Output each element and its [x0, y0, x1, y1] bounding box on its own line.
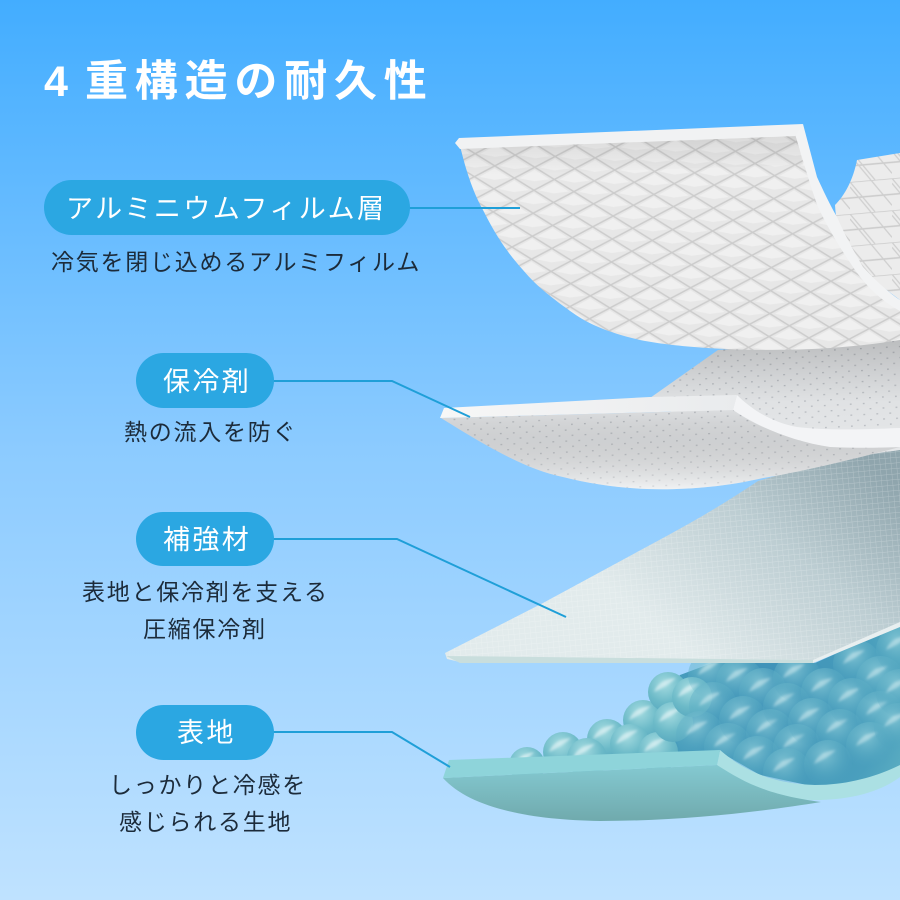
- front sheet: [460, 130, 900, 350]
- layer 2: cold-retaining insulation sheet: [440, 335, 900, 489]
- pill: [44, 180, 410, 235]
- pill: [136, 512, 274, 566]
- layer 1: aluminium film quilted sheet: [455, 124, 900, 350]
- description: 熱の流入を防ぐ: [124, 419, 297, 445]
- callout: aluminium film layer: アルミニウムフィルム層: [66, 194, 386, 224]
- back sheet: [650, 335, 900, 470]
- callout: reinforcement: 圧縮保冷剤: [143, 616, 267, 642]
- back curl: [835, 153, 900, 300]
- title: 重構造の耐久性: [85, 58, 434, 106]
- callout: reinforcement: [82, 512, 329, 642]
- curved right edge: [795, 124, 900, 311]
- top band: [443, 750, 720, 778]
- callout: surface fabric: 表地: [177, 718, 236, 748]
- description: 表地と保冷剤を支える: [82, 579, 329, 605]
- callout: insulation: [124, 353, 297, 445]
- callout: insulation: 保冷剤: [163, 367, 251, 397]
- front sheet: [441, 410, 900, 489]
- description: しっかりと冷感を: [109, 772, 307, 798]
- title: 4: [44, 58, 68, 106]
- layer 3: reinforcement sheet: [445, 440, 900, 663]
- layer 4: bubble lining and teal surface fabric: [443, 625, 900, 821]
- front body: [443, 765, 821, 821]
- callout: surface fabric: [109, 705, 307, 835]
- curved cut edge: [733, 395, 900, 448]
- curved cut edge: [717, 750, 900, 800]
- pill: [136, 705, 274, 760]
- pill: [136, 353, 274, 408]
- callout: reinforcement: 補強材: [163, 525, 251, 555]
- bubble background sheet: [545, 625, 900, 790]
- top band: [455, 124, 803, 149]
- bubbles: [509, 626, 900, 796]
- callout lines: [272, 208, 566, 767]
- top band: [440, 395, 737, 418]
- callout: surface fabric: 感じられる生地: [119, 809, 292, 835]
- description: 冷気を閉じ込めるアルミフィルム: [51, 249, 421, 275]
- callout: aluminium film layer: [44, 180, 421, 275]
